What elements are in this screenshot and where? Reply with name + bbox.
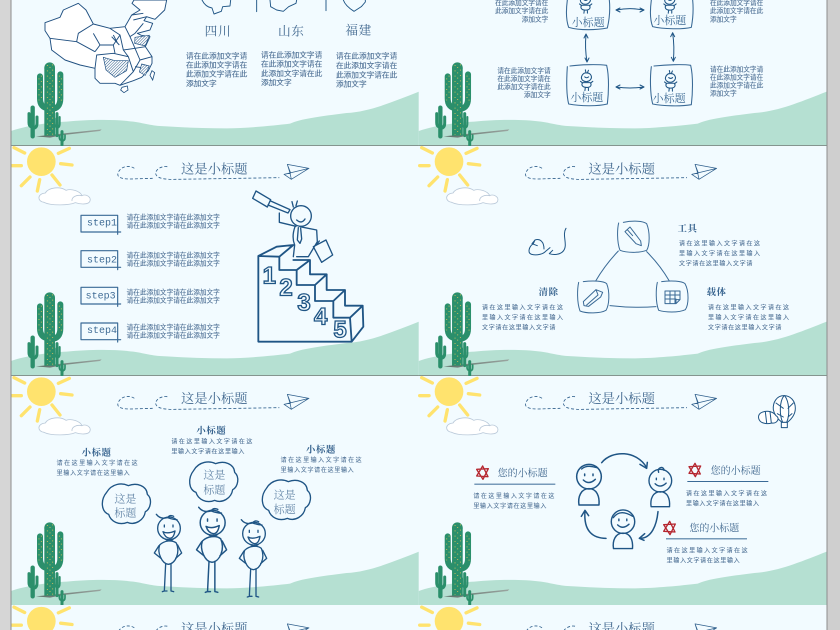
speech bubble right: 标题 xyxy=(274,502,296,516)
callout right bottom: 您的小标题 xyxy=(689,521,739,534)
province names: 福建 xyxy=(345,23,372,38)
left caption: 请在这里输入文字请在这 xyxy=(57,459,138,467)
panel: row 3 left slide, three people xyxy=(11,376,419,606)
tool boxes with icons xyxy=(578,221,688,313)
callout left xyxy=(473,466,555,510)
right caption: 小标题 xyxy=(306,443,336,455)
province names: 山东 xyxy=(278,25,305,39)
icon: hot-air balloon and cloud xyxy=(759,396,795,428)
step labels: step4 xyxy=(87,325,117,336)
left title dashes and paper plane xyxy=(118,624,309,630)
step labels: step1 xyxy=(87,217,117,228)
province descriptions: 在此添加文字请在 xyxy=(186,60,248,70)
step labels: step3 xyxy=(86,291,116,302)
label: 清除: 文字请在这里输入文字请 xyxy=(482,323,555,331)
right text blocks: 请在此添加文字请 xyxy=(710,64,764,73)
label: 清除: 清除 xyxy=(539,286,559,298)
label: 工具 xyxy=(678,223,760,268)
speech bubble middle: 这是 xyxy=(203,469,225,482)
box labels xyxy=(570,13,686,105)
label: 载体 xyxy=(707,286,789,331)
province descriptions: 请在此添加文字请 xyxy=(336,51,398,61)
province descriptions: 此添加文字请在此 xyxy=(336,69,398,79)
province names: 四川 xyxy=(205,25,231,39)
box labels: 小标题 xyxy=(653,91,686,105)
right text blocks: 添加文字 xyxy=(710,89,737,98)
label: 载体: 载体 xyxy=(707,286,727,298)
speech bubble left: 标题 xyxy=(114,505,136,519)
step labels: step2 xyxy=(87,254,117,265)
title dashes and paper plane xyxy=(118,164,309,179)
right text blocks: 此添加文字请在此 xyxy=(710,6,764,15)
panel: row 3 right slide, cycle of people xyxy=(419,376,827,606)
slide scenery: ground and cactus xyxy=(419,376,827,606)
heading: 这是小标题 xyxy=(588,390,655,406)
panel: row 1 right slide, four linked boxes xyxy=(419,0,827,146)
right text blocks: 在此添加文字请在 xyxy=(710,0,764,7)
label: 载体: 里输入文字请在这里输入 xyxy=(708,313,789,321)
panel: row 1 left slide, China map xyxy=(11,0,419,146)
three stick figures xyxy=(154,507,267,597)
slide scenery: ground and cactus xyxy=(419,0,827,146)
slide scenery: ground and cactus xyxy=(11,0,419,146)
step descriptions: 请在此添加文字请在此添加文字 xyxy=(127,331,220,340)
right caption: 里输入文字请在这里输入 xyxy=(281,466,354,474)
callout right top: 请在这里输入文字请在这 xyxy=(686,489,767,497)
label: 清除: 请在这里输入文字请在这 xyxy=(482,303,563,311)
right caption: 请在这里输入文字请在这 xyxy=(281,456,362,464)
province shapes and dividers xyxy=(202,0,365,14)
staircase illustration: 2 xyxy=(279,275,293,302)
sun and cloud xyxy=(12,147,90,205)
province descriptions: 添加文字 xyxy=(261,77,292,87)
three faces xyxy=(577,464,672,549)
panel: row 2 right slide, triangle diagram xyxy=(419,146,827,376)
triangle connector lines xyxy=(596,251,669,307)
left caption: 小标题 xyxy=(82,446,112,458)
label: 载体: 文字请在这里输入文字请 xyxy=(708,323,781,331)
mouse doodle xyxy=(529,228,566,255)
callout left: 您的小标题 xyxy=(498,466,548,479)
slide content xyxy=(45,0,398,93)
callout right top xyxy=(686,463,768,507)
province descriptions: 在此添加文字请在 xyxy=(336,60,398,70)
middle caption: 里输入文字请在这里输入 xyxy=(171,447,244,455)
left slide background xyxy=(11,605,419,630)
left text blocks: 请在此添加文字请 xyxy=(497,66,551,75)
step descriptions: 请在此添加文字请在此添加文字 xyxy=(127,221,220,230)
box labels: 小标题 xyxy=(572,15,605,29)
right text blocks: 在此添加文字请在 xyxy=(710,72,764,81)
left text blocks: 添加文字 xyxy=(524,90,551,99)
province descriptions: 请在此添加文字请 xyxy=(261,49,323,59)
man with telescope xyxy=(253,191,333,262)
slide scenery: ground and cactus xyxy=(419,146,827,376)
staircase illustration: 4 xyxy=(314,303,328,330)
left caption: 里输入文字请在这里输入 xyxy=(57,469,130,477)
step descriptions: 请在此添加文字请在此添加文字 xyxy=(127,323,220,332)
left sun and cloud xyxy=(12,607,90,630)
staircase illustration: 5 xyxy=(333,317,347,344)
slide content xyxy=(495,0,764,106)
middle caption xyxy=(171,424,252,455)
four rounded boxes xyxy=(566,0,693,106)
left text blocks: 添加文字 xyxy=(522,14,549,23)
province descriptions xyxy=(186,49,398,89)
step descriptions: 请在此添加文字请在此添加文字 xyxy=(127,213,220,222)
left text blocks: 在此添加文字请在 xyxy=(497,74,551,83)
callout right bottom xyxy=(664,521,748,565)
slide content xyxy=(473,390,795,565)
province descriptions: 添加文字 xyxy=(336,79,367,89)
step labels xyxy=(81,215,121,342)
step descriptions: 请在此添加文字请在此添加文字 xyxy=(127,259,220,268)
callout right top: 里输入文字请在这里输入 xyxy=(686,499,759,507)
province descriptions: 添加文字 xyxy=(186,78,217,88)
slide content xyxy=(482,160,789,331)
heading: 这是小标题 xyxy=(181,160,248,176)
speech bubble left: 这是 xyxy=(114,492,136,505)
callout right bottom: 请在这里输入文字请在这 xyxy=(667,547,748,555)
step descriptions: 请在此添加文字请在此添加文字 xyxy=(127,295,220,304)
speech bubble middle: 标题 xyxy=(203,482,225,496)
speech bubble right xyxy=(262,480,310,520)
province descriptions: 此添加文字请在此 xyxy=(186,69,248,79)
label: 工具: 文字请在这里输入文字请 xyxy=(679,260,752,268)
right text blocks: 此添加文字请在此 xyxy=(710,81,764,90)
province descriptions: 在此添加文字请在 xyxy=(261,59,323,69)
panel: row 2 left slide, steps xyxy=(11,146,419,376)
speech bubble right: 这是 xyxy=(274,488,296,501)
box labels: 小标题 xyxy=(570,90,603,104)
right text blocks: 添加文字 xyxy=(710,14,737,23)
map of China xyxy=(45,0,167,93)
label: 载体: 请在这里输入文字请在这 xyxy=(708,303,789,311)
callout left: 里输入文字请在这里输入 xyxy=(473,502,546,510)
callout right top: 您的小标题 xyxy=(711,464,761,477)
heading: 这是小标题 xyxy=(181,390,248,406)
box labels: 小标题 xyxy=(653,13,686,27)
circular arrows xyxy=(581,454,658,540)
title dashes and paper plane xyxy=(118,394,309,409)
label: 工具: 请在这里输入文字请在这 xyxy=(679,240,760,248)
right text blocks xyxy=(710,0,764,98)
label: 工具: 里输入文字请在这里输入 xyxy=(679,250,760,258)
left text blocks: 在此添加文字请在 xyxy=(495,0,549,7)
right sun and cloud xyxy=(420,607,498,630)
province descriptions: 此添加文字请在此 xyxy=(261,68,323,78)
label: 工具: 工具 xyxy=(678,223,699,234)
middle caption: 小标题 xyxy=(196,424,226,436)
right caption xyxy=(281,443,362,474)
slide content xyxy=(57,390,362,597)
panel: row 4 slides, cropped by the frame xyxy=(12,605,826,630)
slide scenery: ground and cactus xyxy=(11,376,419,606)
left caption xyxy=(57,446,138,477)
label: 清除 xyxy=(482,286,563,331)
slide content xyxy=(81,160,363,344)
middle caption: 请在这里输入文字请在这 xyxy=(171,437,252,445)
double-headed arrows xyxy=(584,8,675,89)
kid icons in boxes xyxy=(580,0,677,91)
title dashes and paper plane xyxy=(525,164,717,179)
left text blocks: 此添加文字请在此 xyxy=(497,82,551,91)
heading: 这是小标题 xyxy=(588,160,655,176)
callout right bottom: 里输入文字请在这里输入 xyxy=(667,557,740,565)
left text blocks: 此添加文字请在此 xyxy=(495,6,549,15)
speech bubble left xyxy=(102,484,150,524)
sun and cloud xyxy=(420,377,498,435)
speech bubble middle xyxy=(190,462,238,502)
title dashes and paper plane xyxy=(525,394,717,409)
staircase illustration: 1 xyxy=(263,263,276,290)
slide scenery: ground and cactus xyxy=(11,146,419,376)
step descriptions: 请在此添加文字请在此添加文字 xyxy=(127,251,220,260)
staircase illustration xyxy=(258,245,363,344)
sun and cloud xyxy=(12,377,90,435)
left text blocks xyxy=(495,0,551,99)
label: 清除: 里输入文字请在这里输入 xyxy=(482,313,563,321)
province descriptions: 请在此添加文字请 xyxy=(186,50,248,60)
province names xyxy=(205,23,372,39)
callout left: 请在这里输入文字请在这 xyxy=(473,492,554,500)
staircase illustration: 3 xyxy=(297,289,311,316)
right title dashes and paper plane xyxy=(525,624,717,630)
step descriptions xyxy=(127,213,220,340)
right slide background xyxy=(419,605,827,630)
sun and cloud xyxy=(420,147,498,205)
step descriptions: 请在此添加文字请在此添加文字 xyxy=(127,287,220,296)
